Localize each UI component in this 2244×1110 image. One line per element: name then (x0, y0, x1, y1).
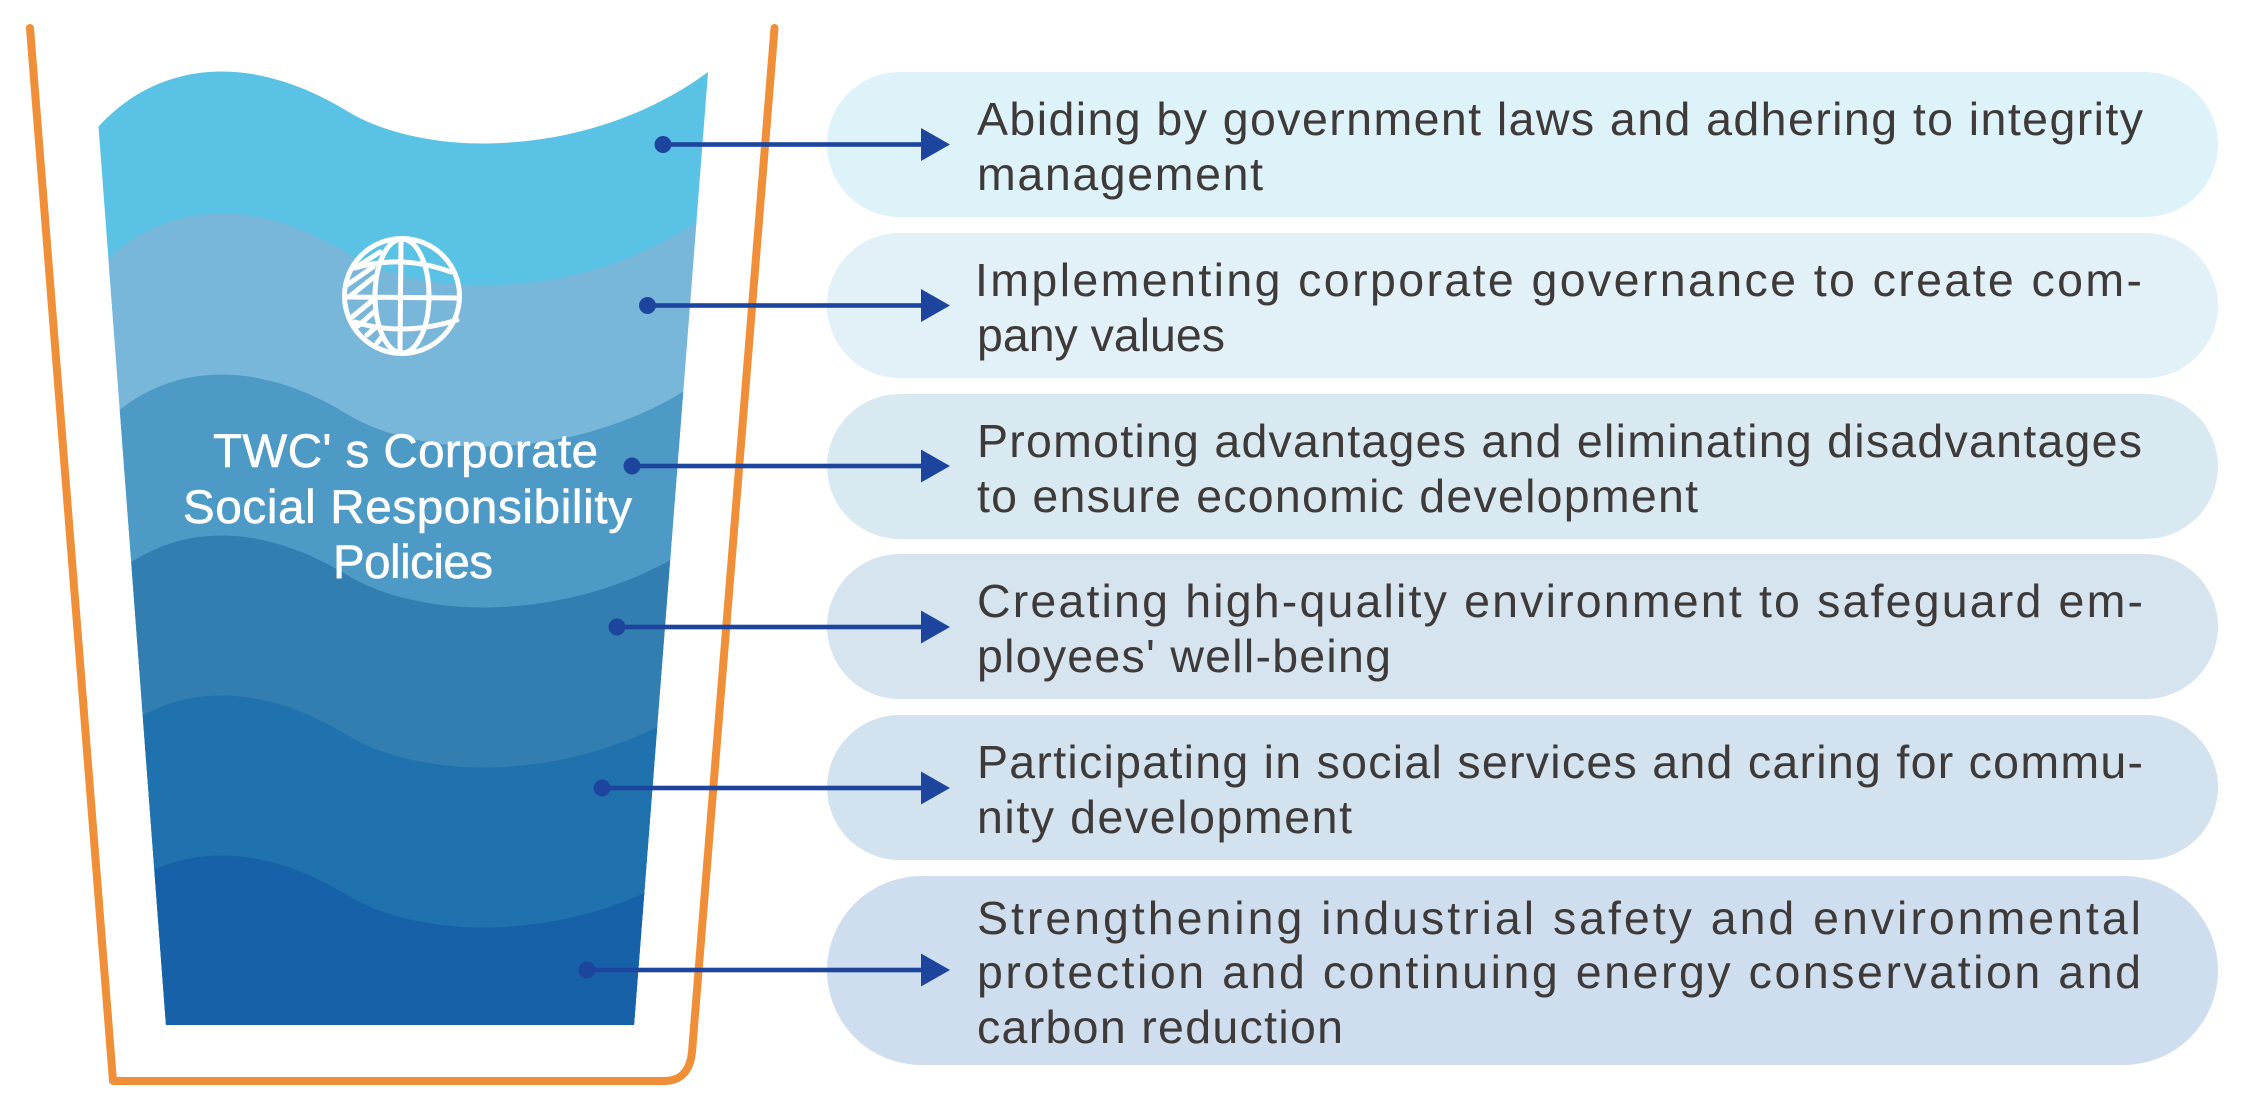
panel: employee well-being (827, 554, 2218, 699)
heading: TWC's Corporate Social Responsibility Policies: TWC' s Corporate (213, 425, 598, 478)
panel: safety and energy conservation: Strengthening industrial safety and environmental (977, 892, 2141, 944)
panel: employee well-being: Creating high-quality environment to safeguard em- (977, 575, 2143, 627)
heading: TWC's Corporate Social Responsibility Policies: Policies (333, 536, 493, 589)
panel: community development: Participating in social services and caring for commu- (977, 736, 2143, 788)
water layer 1 (98, 72, 708, 1025)
heading: TWC's Corporate Social Responsibility Policies (183, 425, 632, 589)
arrow: layer 2 to panel 2 (639, 289, 950, 322)
panel: corporate governance: pany values (977, 309, 1225, 361)
panel: employee well-being: ployees' well-being (977, 630, 1391, 682)
layered water in glass (98, 72, 708, 1025)
panel: safety and energy conservation: protection and continuing energy conservation and (977, 946, 2141, 998)
heading: TWC's Corporate Social Responsibility Policies: Social Responsibility (183, 481, 632, 534)
arrow: layer 4 to panel 4 (608, 610, 950, 644)
arrow: layer 3 to panel 3 (624, 450, 950, 482)
panel: corporate governance (827, 233, 2218, 378)
panel: safety and energy conservation (827, 876, 2218, 1065)
panel: community development (827, 715, 2218, 860)
panel: economic development: to ensure economic development (977, 470, 1698, 522)
orange glass outline (30, 28, 774, 1081)
panel: laws and integrity (827, 72, 2218, 217)
panel: corporate governance: Implementing corporate governance to create com- (975, 254, 2142, 306)
water layer 5 (142, 696, 658, 1024)
panel: economic development (827, 394, 2218, 539)
arrow: layer 1 to panel 1 (654, 128, 950, 161)
water layer 2 (98, 214, 708, 1025)
panel: economic development: Promoting advantages and eliminating disadvantages (977, 415, 2142, 467)
panel: community development: nity development (977, 791, 1352, 843)
panel: safety and energy conservation: carbon reduction (977, 1001, 1343, 1053)
arrow: layer 5 to panel 5 (594, 772, 950, 804)
icon: globe (344, 238, 460, 354)
panel: laws and integrity: Abiding by government laws and adhering to integrity (977, 93, 2144, 145)
water layer 3 (98, 374, 708, 1025)
water layer 4 (131, 536, 670, 1024)
arrow: layer 6 to panel 6 (578, 954, 950, 986)
water layer 6 (154, 856, 644, 1025)
panel: laws and integrity: management (977, 148, 1263, 200)
